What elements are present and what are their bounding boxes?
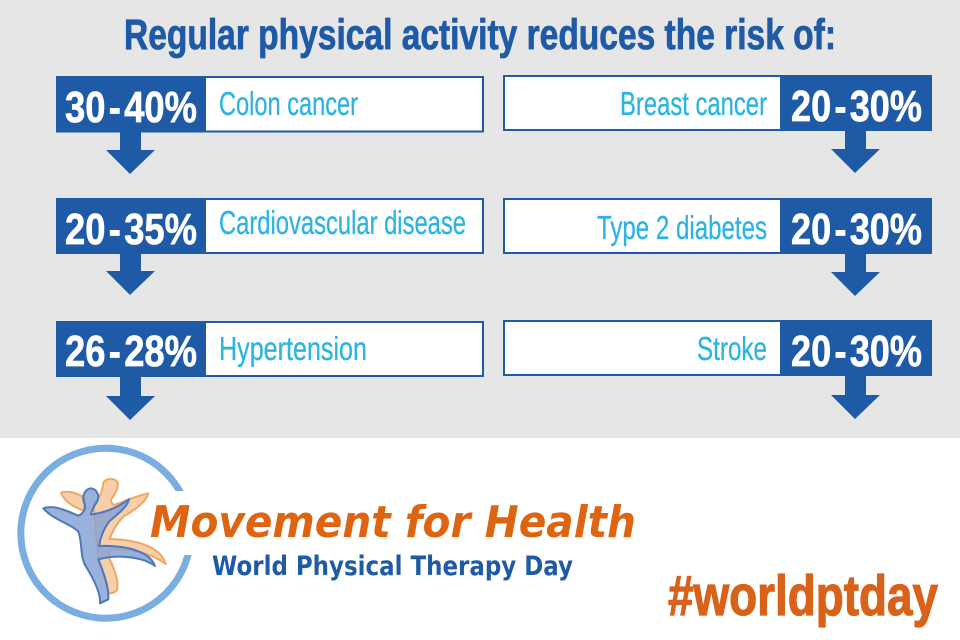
panel: breast cancer: 20-30%: [791, 82, 922, 131]
panel: type 2 diabetes: [504, 198, 932, 296]
panel: colon cancer: 30-40%: [65, 83, 197, 132]
panel: cardiovascular disease: 20-35%: [65, 205, 197, 254]
panel: colon cancer: [56, 76, 483, 174]
panel: cardiovascular disease: Cardiovascular disease: [219, 204, 466, 241]
panel: colon cancer: Colon cancer: [219, 85, 358, 122]
panel: stroke: Stroke: [697, 330, 767, 367]
icon: movement for health logo: [21, 448, 205, 618]
panel: breast cancer: [504, 75, 932, 173]
panel: breast cancer: Breast cancer: [620, 85, 767, 122]
panel: stroke: 20-30%: [791, 327, 922, 376]
panel: hypertension: [56, 321, 483, 420]
panel: hypertension: Hypertension: [219, 330, 367, 367]
logo subheading: world physical therapy day: World Physical Therapy Day: [212, 551, 573, 582]
panel: type 2 diabetes: Type 2 diabetes: [597, 209, 767, 246]
logo heading: movement for health: Movement for Health: [150, 497, 636, 548]
panel: hypertension: 26-28%: [65, 327, 197, 376]
grey background panel: [0, 0, 960, 438]
panel: cardiovascular disease: [56, 198, 483, 295]
panel: stroke: [504, 320, 932, 419]
panel: type 2 diabetes: 20-30%: [791, 205, 922, 254]
